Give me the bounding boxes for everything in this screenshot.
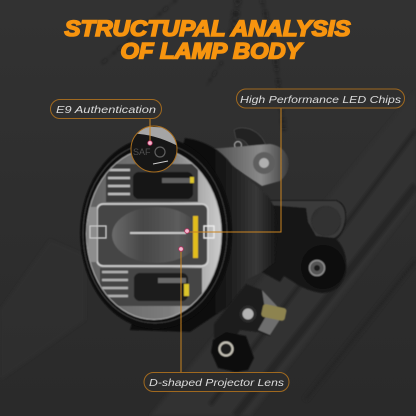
callout: D-shaped Projector Lens: D-shaped Projector Lens — [149, 377, 285, 389]
callout: D-shaped Projector Lens — [144, 247, 289, 392]
title — [64, 16, 351, 64]
main projector housing — [88, 204, 214, 266]
upper projector — [106, 164, 198, 202]
magnifier: E9 mark detail — [128, 126, 178, 172]
lamp: front lens — [80, 137, 232, 330]
lamp: top adjuster arm — [209, 128, 289, 186]
lamp: lower adjuster and foot — [211, 284, 287, 372]
callout: High Performance LED Chips — [185, 89, 404, 233]
title: OF LAMP BODY — [120, 38, 304, 64]
callout: High Performance LED Chips: High Performance LED Chips — [240, 94, 402, 106]
lower projector — [100, 268, 202, 306]
callout: E9 Authentication — [50, 100, 162, 145]
lamp: rear housing — [130, 138, 277, 332]
callout: E9 Authentication: E9 Authentication — [56, 104, 156, 116]
magnifier: E9 mark detail: SAF — [133, 147, 151, 157]
title: STRUCTUPAL ANALYSIS — [64, 16, 351, 41]
lamp: mounting bracket — [250, 200, 346, 293]
